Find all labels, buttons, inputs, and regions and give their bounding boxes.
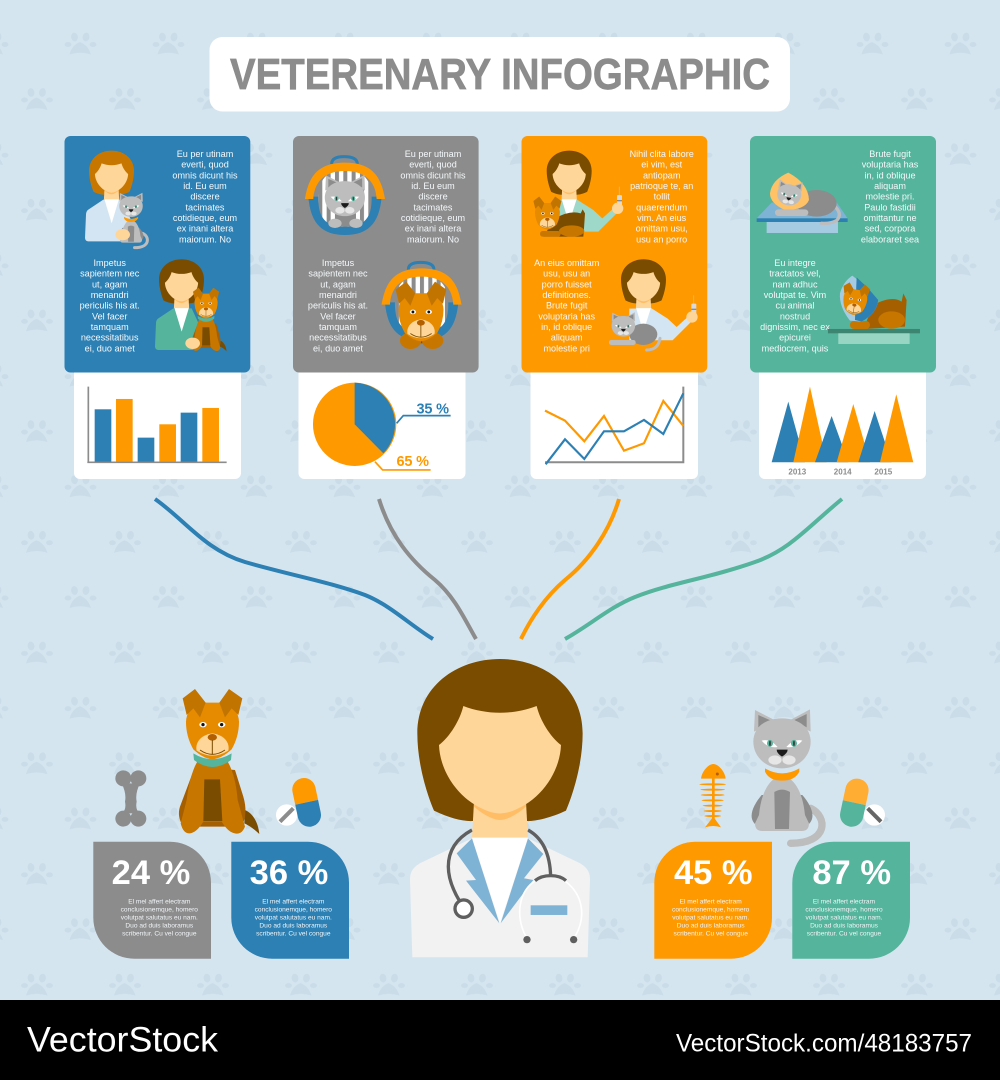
text: teal top: omittantur ne	[863, 213, 917, 223]
text: teal bottom: epicurei	[779, 333, 811, 343]
text: blue bottom: Vel facer	[92, 311, 127, 321]
text: orange top: omittam usu,	[636, 224, 688, 234]
icon: vet with dog	[155, 259, 227, 351]
text: blue bottom: periculis his at.	[80, 301, 140, 311]
text: teal bottom: dignissim, nec ex	[760, 322, 830, 332]
stat card: 45 percent: 45 %	[674, 854, 753, 892]
text: orange top: ei vim, est	[641, 160, 683, 170]
text: teal bottom: tractatos vel,	[769, 269, 821, 279]
icon: sitting cat, fish, capsule	[699, 709, 885, 843]
text: teal card note: conclusionemque, homero	[805, 906, 883, 913]
text: grey bottom: Vel facer	[320, 311, 356, 321]
icon: vet vaccinating dog	[533, 151, 623, 237]
text: blue top: tacimates	[186, 202, 225, 212]
text: orange top: quaerendum	[636, 202, 687, 212]
text: grey bottom: periculis his at.	[308, 301, 368, 311]
text: grey card note: volutpat salutatus eu nam.	[121, 914, 198, 921]
connector: teal	[565, 499, 842, 639]
text: grey card note: scribentur. Cu vel congue	[122, 930, 197, 937]
text: grey bottom: sapientem nec	[308, 269, 368, 279]
label: 65 percent: 65 %	[396, 454, 429, 470]
text: grey top: everti, quod	[409, 160, 457, 170]
text: orange card note: scribentur. Cu vel congue	[673, 930, 748, 937]
text: teal top: Paulo fastidii	[864, 202, 916, 212]
text: grey card note: El mel affert electram	[128, 898, 191, 905]
text: blue bottom: menandri	[91, 290, 129, 300]
text: blue card note: scribentur. Cu vel congue	[256, 930, 331, 937]
panel: teal recovery	[750, 136, 936, 372]
text: grey bottom: ut, agam	[320, 279, 356, 289]
text: grey top: cotidieque, eum	[401, 213, 465, 223]
text: blue card note: conclusionemque, homero	[255, 906, 332, 913]
text: teal bottom: nostrud	[780, 311, 810, 321]
text: teal card note: scribentur. Cu vel congue	[807, 930, 882, 937]
icon: dog in carrier	[382, 262, 462, 349]
text: grey bottom: tamquam	[319, 322, 357, 332]
icon: bone	[115, 770, 146, 827]
text: grey card note: conclusionemque, homero	[121, 906, 198, 913]
stat card: 87 percent	[792, 842, 910, 959]
stat card: 36 percent	[231, 842, 349, 959]
text: orange top: patrioque te, an	[630, 181, 693, 191]
text: blue bottom: ut, agam	[92, 279, 127, 289]
icon: vet with cat	[85, 151, 147, 248]
text: orange top: Nihil clita labore	[630, 149, 694, 159]
title: VETERENARY INFOGRAPHIC	[230, 50, 770, 99]
text: orange bottom: voluptaria has	[538, 311, 595, 321]
icon: capsule and pill	[838, 776, 885, 829]
text: grey bottom: Impetus	[322, 258, 355, 268]
bar chart	[87, 387, 227, 462]
watermark bar	[0, 1000, 1000, 1080]
text: grey bottom: ei, duo amet	[313, 343, 363, 353]
icon: cat in carrier	[305, 157, 385, 235]
text: teal bottom: nam adhuc	[772, 279, 818, 289]
text: blue top: Eu per utinam	[177, 149, 233, 159]
panel: grey carriers	[293, 136, 479, 372]
stat card: 24 percent: 24 %	[112, 854, 190, 892]
text: teal card note: Duo ad duis laboramus	[810, 922, 879, 929]
watermark bar: VectorStock.com/48183757	[676, 1030, 972, 1058]
text: orange top: tollit	[654, 192, 670, 202]
text: orange bottom: in, id oblique	[541, 322, 592, 332]
stat card: 24 percent	[93, 842, 211, 959]
text: teal top: molestie pri.	[865, 192, 915, 202]
text: grey card note: Duo ad duis laboramus	[125, 922, 194, 929]
text: blue top: everti, quod	[181, 160, 229, 170]
text: blue bottom: sapientem nec	[80, 269, 140, 279]
connector: grey	[379, 499, 476, 639]
icon: cat with cone on table	[757, 173, 848, 233]
text: grey top: omnis dicunt his	[400, 170, 466, 180]
stat card: 45 percent	[654, 842, 772, 959]
text: orange bottom: porro fuisset	[542, 279, 592, 289]
text: orange bottom: aliquam	[551, 333, 583, 343]
text: blue top: maiorum. No	[179, 234, 231, 244]
text: blue top: id. Eu eum	[183, 181, 227, 191]
title	[210, 37, 790, 112]
icon: dog with cone on table	[828, 276, 920, 344]
label: 35 percent: 35 %	[416, 402, 449, 418]
line chart	[545, 387, 683, 464]
text: blue card note: El mel affert electram	[262, 898, 325, 905]
text: orange top: vim. An eius	[637, 213, 687, 223]
text: grey bottom: menandri	[319, 290, 357, 300]
panel: blue vet and pets	[64, 136, 250, 372]
text: orange bottom: usu, usu an	[543, 269, 590, 279]
text: blue card note: volutpat salutatus eu nam.	[255, 914, 332, 921]
text: blue top: omnis dicunt his	[172, 170, 238, 180]
text: teal top: aliquam	[874, 181, 906, 191]
connector: orange	[521, 499, 619, 639]
icon: vet vaccinating cat	[609, 259, 698, 350]
text: blue card note: Duo ad duis laboramus	[259, 922, 328, 929]
text: orange bottom: molestie pri	[543, 343, 590, 353]
text: teal top: Brute fugit	[869, 149, 911, 159]
text: grey top: id. Eu eum	[411, 181, 455, 191]
text: orange card note: conclusionemque, homero	[672, 906, 750, 913]
text: orange bottom: definitiones.	[542, 290, 591, 300]
pie chart	[313, 383, 451, 470]
text: teal top: in, id oblique	[864, 170, 916, 180]
triangle chart	[772, 387, 913, 476]
text: blue bottom: Impetus	[94, 258, 126, 268]
text: blue top: discere	[190, 192, 220, 202]
text: orange top: usu an porro	[636, 234, 687, 244]
icon: fish bone	[699, 764, 726, 827]
text: grey top: Eu per utinam	[405, 149, 461, 159]
watermark bar: VectorStock	[27, 1020, 219, 1060]
text: blue bottom: tamquam	[91, 322, 129, 332]
text: grey top: discere	[418, 192, 448, 202]
panel: orange vaccination	[522, 136, 707, 372]
text: teal card note: volutpat salutatus eu nam.	[806, 914, 883, 921]
text: teal bottom: cu animal	[776, 301, 814, 311]
year labels: 2013	[788, 468, 807, 476]
text: blue top: cotidieque, eum	[173, 213, 237, 223]
text: orange card note: Duo ad duis laboramus	[677, 922, 745, 929]
text: teal top: voluptaria has	[862, 160, 919, 170]
text: blue top: ex inani altera	[177, 224, 234, 234]
year labels: 2015	[874, 468, 893, 476]
text: teal bottom: Eu integre	[774, 258, 816, 268]
text: teal bottom: mediocrem, quis	[762, 343, 829, 353]
text: orange card note: El mel affert electram	[680, 898, 742, 905]
stat card: 36 percent: 36 %	[250, 854, 328, 892]
main vet figure	[410, 659, 590, 957]
year labels	[788, 468, 893, 476]
text: orange card note: volutpat salutatus eu nam.	[672, 914, 749, 921]
icon: sitting dog, bone, capsule	[115, 689, 323, 834]
text: teal card note: El mel affert electram	[813, 898, 876, 905]
text: teal top: elaboraret sea	[861, 234, 920, 244]
text: orange bottom: An eius omittam	[534, 258, 599, 268]
text: grey bottom: necessitatibus	[309, 333, 367, 343]
connector: blue	[155, 499, 433, 639]
text: grey top: tacimates	[414, 202, 453, 212]
text: teal top: sed, corpora	[865, 224, 916, 234]
text: blue bottom: ei, duo amet	[85, 343, 135, 353]
icon: pill and capsule	[276, 776, 323, 829]
white chart cards	[74, 360, 926, 479]
text: grey top: ex inani altera	[405, 224, 462, 234]
text: teal bottom: volutpat te. Vim	[764, 290, 826, 300]
text: grey top: maiorum. No	[407, 234, 459, 244]
text: orange bottom: Brute fugit	[546, 301, 588, 311]
text: orange top: antiopam	[643, 170, 680, 180]
year labels: 2014	[834, 468, 852, 476]
stat card: 87 percent: 87 %	[812, 854, 891, 892]
text: blue bottom: necessitatibus	[81, 333, 139, 343]
